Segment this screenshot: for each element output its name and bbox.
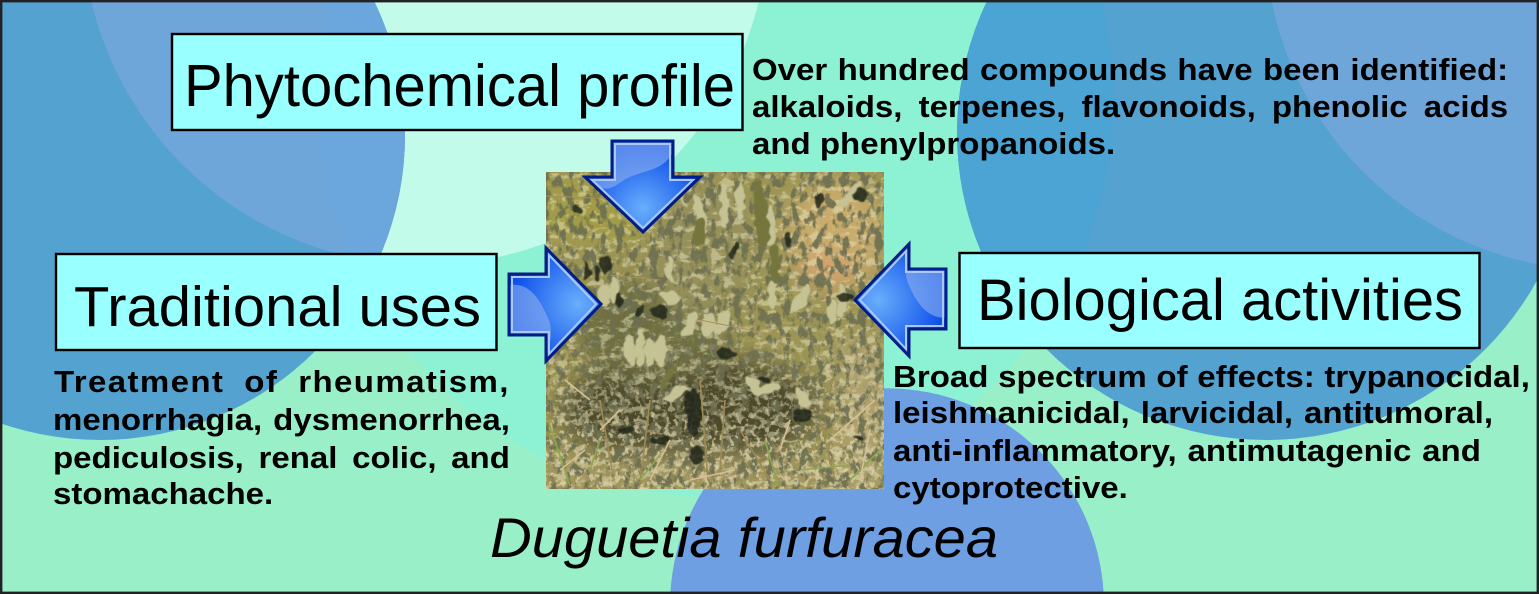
- text: Treatment of rheumatism,: [54, 364, 510, 399]
- text: pediculosis, renal colic, and: [53, 440, 510, 475]
- text: leishmanicidal, larvicidal, antitumoral,: [893, 395, 1493, 430]
- photo of Duguetia furfuracea shrub: [546, 172, 885, 489]
- text: stomachache.: [53, 476, 273, 511]
- arrow: left from Biological activities to photo: [855, 244, 946, 356]
- text block: phytochemical profile description: [752, 52, 1508, 161]
- species name caption: Duguetia furfuracea: [490, 506, 998, 569]
- panel: Phytochemical profile heading box: [172, 34, 742, 130]
- panel: Traditional uses heading box: [56, 254, 496, 350]
- text block: traditional uses description: [53, 364, 510, 511]
- arrow: down from Phytochemical profile to photo: [585, 141, 700, 232]
- text: Over hundred compounds have been identified:: [752, 52, 1508, 87]
- text: menorrhagia, dysmenorrhea,: [53, 402, 510, 437]
- text: Broad spectrum of effects: trypanocidal,: [893, 359, 1530, 394]
- panel: Biological activities heading box: Biological activities: [977, 268, 1463, 333]
- text block: biological activities description: [893, 359, 1530, 505]
- text: cytoprotective.: [893, 470, 1128, 505]
- text: anti-inflammatory, antimutagenic and: [893, 433, 1481, 468]
- panel: Traditional uses heading box: Traditional uses: [74, 275, 481, 339]
- arrow: right from Traditional uses to photo: [509, 248, 601, 361]
- panel: Biological activities heading box: [960, 253, 1480, 348]
- text: alkaloids, terpenes, flavonoids, phenolic acids: [752, 89, 1508, 124]
- panel: Phytochemical profile heading box: Phytochemical profile: [184, 53, 735, 119]
- text: and phenylpropanoids.: [752, 126, 1115, 161]
